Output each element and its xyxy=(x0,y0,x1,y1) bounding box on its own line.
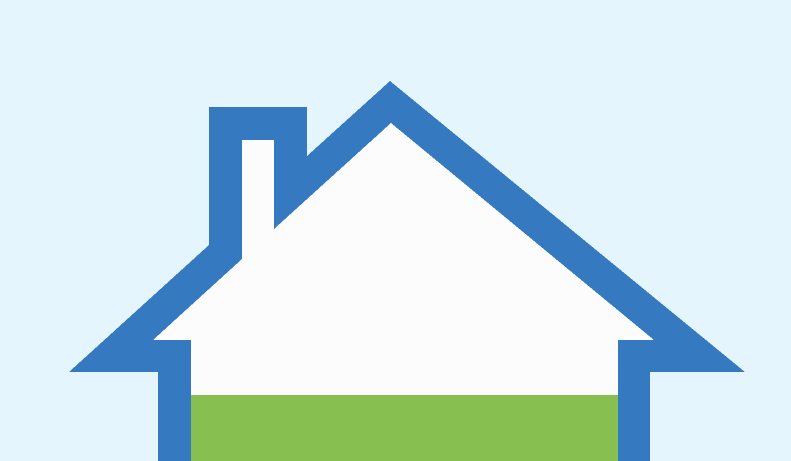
green floor xyxy=(191,395,618,461)
house outline xyxy=(69,81,745,461)
house interior xyxy=(153,123,654,461)
